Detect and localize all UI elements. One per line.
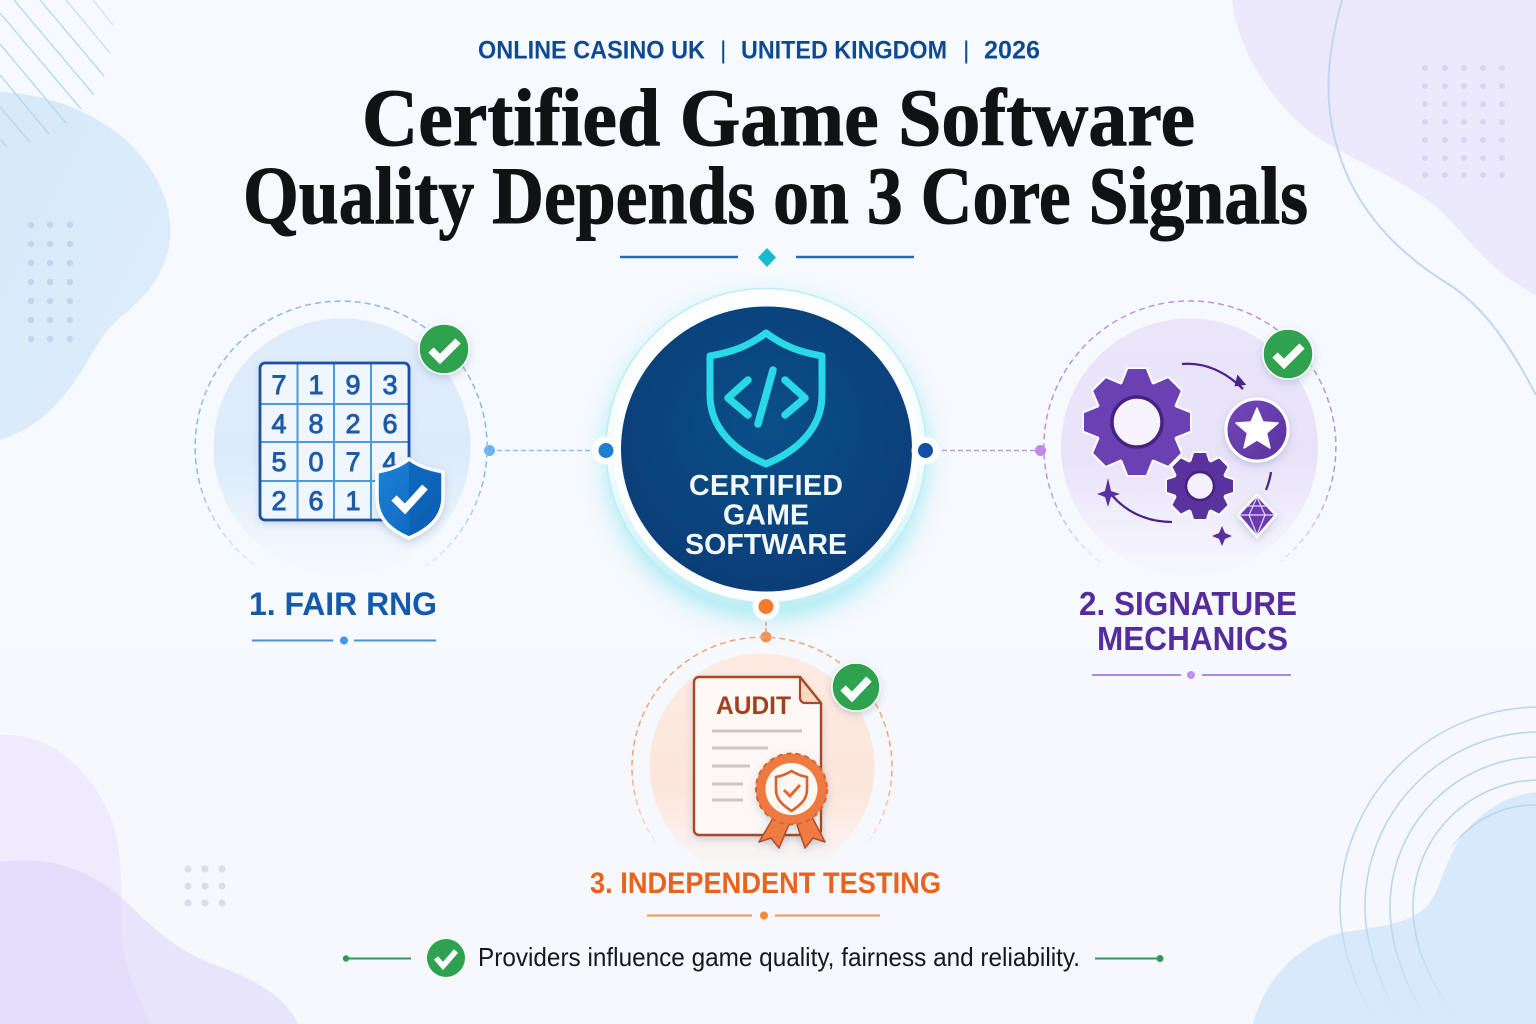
eyebrow line: [478, 36, 1040, 64]
pale disc: [650, 654, 874, 878]
icon: number grid: 1: [345, 486, 361, 516]
dashed ring: [1044, 301, 1336, 562]
icon: green check: [419, 324, 469, 374]
node: bottom: [752, 593, 780, 620]
icon: number grid: 7: [271, 370, 287, 400]
icon: motion arrows and sparkles: [1097, 364, 1271, 546]
title: Quality Depends on 3 Core Signals: [243, 150, 1308, 241]
connector: left: [484, 445, 598, 456]
central badge: [606, 288, 926, 618]
inner white ring: [613, 296, 919, 602]
icon: number grid: 8: [308, 409, 324, 439]
label: signature mechanics: 2. SIGNATURE: [1079, 585, 1297, 622]
icon: number grid: 6: [382, 409, 398, 439]
icon: number grid: 2: [271, 486, 287, 516]
label: independent testing: 3. INDEPENDENT TESTING: [590, 867, 941, 900]
panel: independent testing: [632, 637, 892, 878]
label: signature mechanics: [1079, 585, 1297, 679]
dashed ring: [195, 301, 487, 568]
icon: gem: [1238, 495, 1276, 537]
background blob: left blue: [0, 92, 170, 440]
icon: number grid: 4: [382, 447, 398, 477]
icon: green check: [427, 939, 465, 977]
background blobs: bottom left purple: [0, 735, 298, 1024]
title divider: [620, 248, 914, 267]
background dots: bottom left: [184, 865, 226, 907]
background blob: bottom right blue: [1253, 792, 1536, 1024]
icon: number grid: 1: [308, 370, 324, 400]
icon: number grid: 4: [271, 409, 287, 439]
background dots: top right: [1422, 65, 1505, 178]
label: fair RNG: [249, 586, 437, 644]
dark disc: [621, 306, 912, 592]
label: signature mechanics: MECHANICS: [1097, 620, 1288, 657]
icon: shield with check: [377, 459, 443, 538]
connector: bottom: [760, 616, 772, 642]
background concentric arcs: [1340, 707, 1536, 1024]
icon: green check: [832, 663, 880, 711]
dashed ring: [632, 637, 892, 841]
footer statement: Providers influence game quality, fairness and reliability.: [478, 942, 1080, 972]
icon: number grid: [260, 363, 409, 520]
background diagonal lines: [0, 0, 113, 147]
icon: audit document: [694, 677, 821, 835]
eyebrow line: ONLINE CASINO UK: [478, 36, 705, 64]
icon: number grid: 2: [345, 409, 361, 439]
icon: number grid: 7: [345, 447, 361, 477]
icon: certification seal: [756, 754, 827, 848]
node: left: [592, 436, 620, 464]
eyebrow line: UNITED KINGDOM: [741, 36, 947, 64]
icon: number grid: 5: [271, 447, 287, 477]
eyebrow line: |: [720, 36, 726, 64]
icon: star badge: [1226, 399, 1288, 461]
pale disc: [1061, 318, 1318, 576]
label: fair RNG: 1. FAIR RNG: [249, 586, 437, 622]
node: right: [912, 436, 940, 464]
panel: signature mechanics: [1044, 301, 1336, 576]
panel: fair RNG: [195, 301, 487, 576]
icon: number grid: 9: [345, 370, 361, 400]
badge text: GAME: [723, 500, 809, 532]
icon: number grid: 0: [308, 447, 324, 477]
background curve: top right: [1328, 0, 1536, 395]
cyan glow: [606, 298, 926, 618]
badge text: [685, 470, 847, 561]
icon: audit document: AUDIT: [716, 692, 791, 720]
icon: number grid: 6: [308, 486, 324, 516]
label: independent testing: [590, 867, 941, 920]
connector: right: [934, 445, 1046, 456]
background blob: top right purple: [1232, 0, 1536, 295]
icon: code shield: [710, 333, 822, 464]
pale disc: [214, 318, 470, 576]
footer statement: [343, 939, 1164, 977]
badge text: SOFTWARE: [685, 529, 847, 561]
outer halo ring: [606, 288, 926, 608]
title: Certified Game Software: [362, 72, 1195, 163]
title: [243, 72, 1308, 241]
background dots: left: [28, 222, 73, 342]
badge text: CERTIFIED: [689, 470, 843, 502]
icon: green check: [1263, 329, 1313, 379]
icon: number grid: 3: [382, 370, 398, 400]
eyebrow line: 2026: [984, 36, 1040, 64]
icon: large gear: [1084, 369, 1190, 475]
eyebrow line: |: [963, 36, 970, 64]
icon: small gear: [1167, 453, 1233, 519]
